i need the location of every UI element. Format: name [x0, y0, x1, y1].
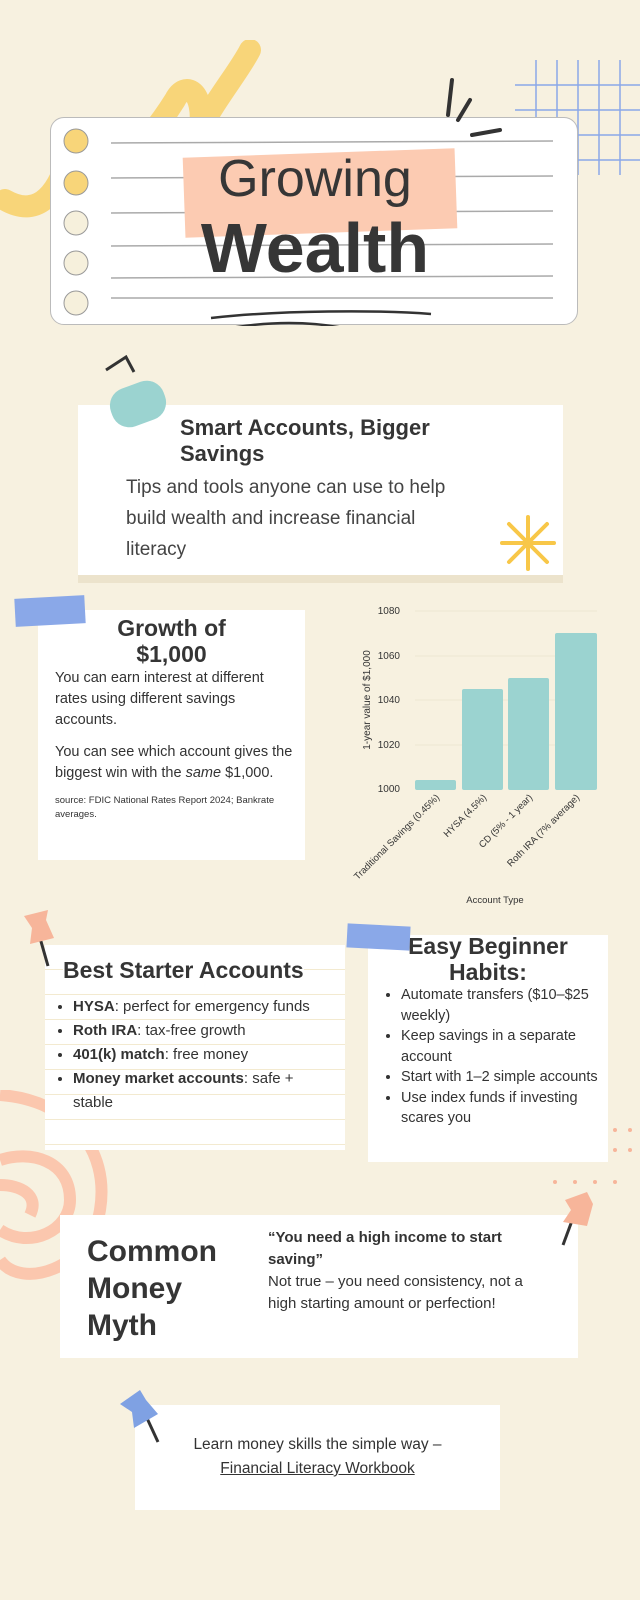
list: HYSA: perfect for emergency funds	[73, 998, 310, 1015]
body text: You can earn interest at different rates using different savings accounts.	[55, 670, 264, 728]
body text: Tips and tools anyone can use to help build wealth and increase financial literacy	[126, 477, 445, 560]
heading: Growth of	[117, 615, 226, 641]
bar chart: 1060	[378, 651, 400, 662]
myth text	[268, 1229, 523, 1312]
blue tape	[346, 923, 411, 951]
list	[58, 998, 310, 1111]
footer text: Financial Literacy Workbook	[220, 1460, 415, 1477]
myth text: “You need a high income to start saving”	[268, 1229, 502, 1268]
list: Start with 1–2 simple accounts	[401, 1069, 598, 1085]
panel: growth of $1000	[38, 610, 305, 860]
title card	[50, 117, 578, 325]
decoration: yellow scribble	[0, 40, 261, 218]
decoration: dots	[553, 1128, 632, 1184]
heading: Myth	[87, 1309, 157, 1342]
list: Keep savings in a separate account	[401, 1028, 576, 1064]
bar chart: 1-year value of $1,000	[362, 650, 373, 750]
title text	[201, 150, 429, 287]
blue tape	[14, 595, 86, 627]
pink tape	[183, 148, 457, 238]
list	[386, 987, 598, 1126]
heading: Easy Beginner Habits:	[408, 933, 568, 985]
bar chart: HYSA (4.5%)	[442, 792, 489, 840]
icon: teal clip	[105, 354, 166, 428]
bar chart: Traditional Savings (0.45%)	[352, 792, 442, 882]
heading	[117, 615, 226, 667]
icon: spark lines	[446, 78, 502, 137]
bar chart: 1000	[378, 784, 400, 795]
list: Automate transfers ($10–$25 weekly)	[401, 987, 589, 1024]
panel: smart accounts	[78, 405, 563, 575]
body text: source: FDIC National Rates Report 2024; Bankrate averages.	[55, 795, 274, 820]
title text: Growing	[218, 150, 412, 208]
bar chart	[352, 606, 597, 906]
bar chart: Account Type	[466, 895, 524, 906]
panel: common money myth	[60, 1215, 578, 1358]
footer text: Learn money skills the simple way –	[193, 1436, 442, 1453]
list: Use index funds if investing scares you	[401, 1090, 578, 1126]
bar chart: Roth IRA (7% average)	[505, 792, 582, 869]
footer text	[193, 1436, 442, 1477]
panel: best starter accounts	[45, 945, 345, 1150]
heading: Money	[87, 1272, 182, 1305]
heading: Smart Accounts, Bigger Savings	[180, 415, 430, 466]
list: Money market accounts: safe + stable	[73, 1070, 294, 1111]
myth text: Not true – you need consistency, not a high starting amount or perfection!	[268, 1273, 523, 1312]
bar chart: 1080	[378, 606, 400, 617]
panel: footer	[135, 1405, 500, 1510]
panel: easy beginner habits	[368, 935, 608, 1162]
heading	[87, 1235, 217, 1342]
list: Roth IRA: tax-free growth	[73, 1022, 246, 1039]
icon: blue pin	[120, 1390, 160, 1443]
body text	[55, 670, 292, 820]
icon: yellow star	[500, 515, 556, 571]
body text: You can see which account gives the biggest win with the same $1,000.	[55, 744, 292, 781]
list: 401(k) match: free money	[73, 1046, 248, 1063]
bar chart: 1040	[378, 695, 400, 706]
heading: Best Starter Accounts	[63, 957, 304, 983]
icon: peach pin	[24, 910, 54, 966]
decoration: blue grid	[515, 60, 640, 175]
bar chart: CD (5% - 1 year)	[477, 792, 535, 851]
decoration: peach spiral	[0, 1090, 108, 1280]
heading: $1,000	[136, 641, 207, 667]
title text: Wealth	[201, 209, 429, 287]
bar chart: 1020	[378, 740, 400, 751]
heading: Common	[87, 1235, 217, 1268]
notebook lines and holes	[64, 128, 553, 326]
icon: peach pin	[562, 1192, 593, 1246]
